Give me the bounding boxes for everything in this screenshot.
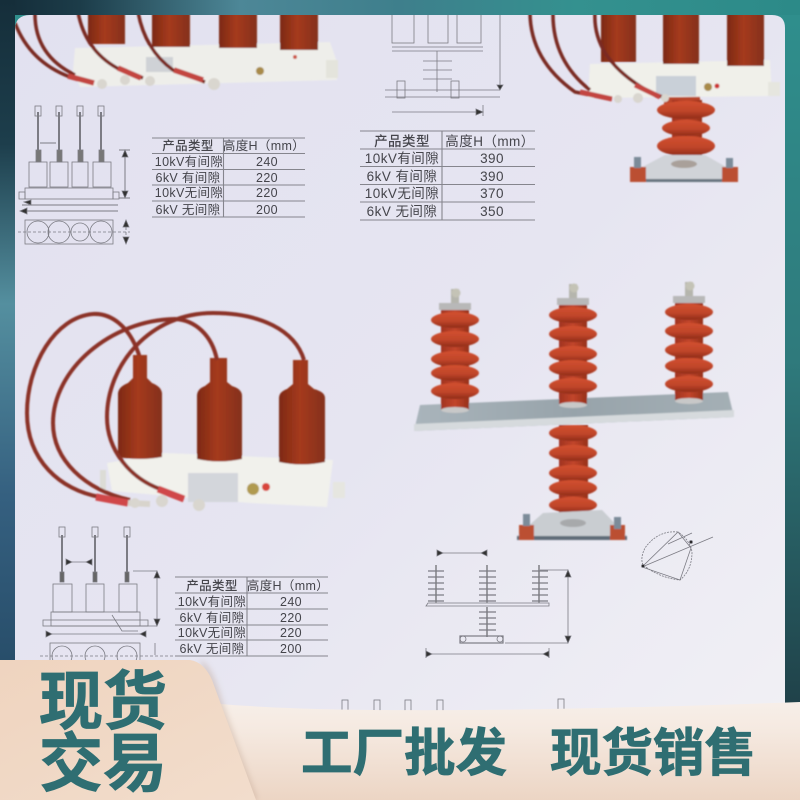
steel bar	[414, 392, 734, 431]
table: lower left heights: 240	[280, 595, 302, 609]
bottom ribbon	[0, 660, 800, 800]
table: lower left heights: 200	[280, 642, 302, 656]
table: top left heights: 10kV无间隙	[155, 186, 223, 200]
table: top centre heights: 高度H（mm）	[445, 133, 535, 149]
line drawing: insulator assembly dimensions	[426, 550, 571, 658]
table: top left heights: 6kV 有间隙	[156, 171, 220, 185]
table: top left heights: 6kV 无间隙	[156, 203, 220, 217]
table: lower left heights	[175, 577, 329, 656]
table: lower left heights: 产品类型	[186, 579, 238, 593]
table: top centre heights: 370	[480, 186, 504, 201]
left peach tab	[0, 660, 256, 800]
table: top centre heights: 6kV 有间隙	[367, 169, 437, 184]
table: top centre heights: 10kV无间隙	[365, 186, 439, 201]
upper insulator right	[665, 282, 713, 404]
table: top left heights: 10kV有间隙	[155, 155, 223, 169]
table: top left heights	[152, 138, 305, 217]
small clipped drawing tops above ribbon	[342, 699, 564, 712]
table: top centre heights: 产品类型	[374, 134, 430, 149]
table: top left heights: 220	[256, 171, 278, 185]
heading: spot trading: 现货	[39, 666, 167, 738]
table: top centre heights: 390	[480, 151, 504, 166]
line drawing: four-pole dimensions	[18, 106, 130, 244]
table: lower left heights: 220	[280, 611, 302, 625]
table: top left heights: 高度H（mm）	[223, 138, 305, 153]
table: top left heights: 200	[256, 203, 278, 217]
table: lower left heights: 10kV无间隙	[178, 626, 246, 640]
table: top left heights: 220	[256, 186, 278, 200]
table: lower left heights: 220	[280, 626, 302, 640]
heading: spot trading	[39, 666, 167, 800]
label plate and indicator	[188, 473, 238, 502]
table: lower left heights: 6kV 无间隙	[180, 642, 244, 656]
table: top centre heights: 6kV 无间隙	[367, 204, 437, 219]
cable: left pole	[27, 314, 140, 497]
table: lower left heights: 高度H（mm）	[247, 578, 329, 593]
heading: spot trading: 交易	[39, 728, 167, 800]
table: top centre heights: 350	[480, 204, 504, 219]
upper insulator left	[431, 288, 479, 413]
table: top left heights: 产品类型	[162, 139, 214, 153]
upper insulator middle	[549, 284, 597, 408]
table: top left heights: 240	[256, 155, 278, 169]
product photo: arrester with insulator, top right	[530, 12, 780, 182]
table: top centre heights: 10kV有间隙	[365, 151, 439, 166]
product photo: four-pole arrester, top left	[15, 12, 338, 90]
line drawing: base plate hole pattern	[642, 532, 713, 580]
line drawing: top centre	[385, 12, 503, 116]
table: top centre heights	[360, 131, 535, 220]
tagline: spot sales: 现货销售	[550, 724, 756, 782]
table: top centre heights: 390	[480, 169, 504, 184]
product photo: insulator assembly on steel bar	[414, 282, 734, 540]
tagline: factory wholesale: 工厂批发	[301, 724, 507, 782]
lower insulator	[549, 425, 597, 525]
table: lower left heights: 6kV 有间隙	[180, 611, 244, 625]
cables	[53, 319, 217, 500]
base plate	[517, 510, 627, 540]
line drawing: three-pole dimensions	[40, 527, 175, 666]
product photo: three-pole arrester with cables	[27, 313, 345, 511]
table: lower left heights: 10kV有间隙	[178, 595, 246, 609]
